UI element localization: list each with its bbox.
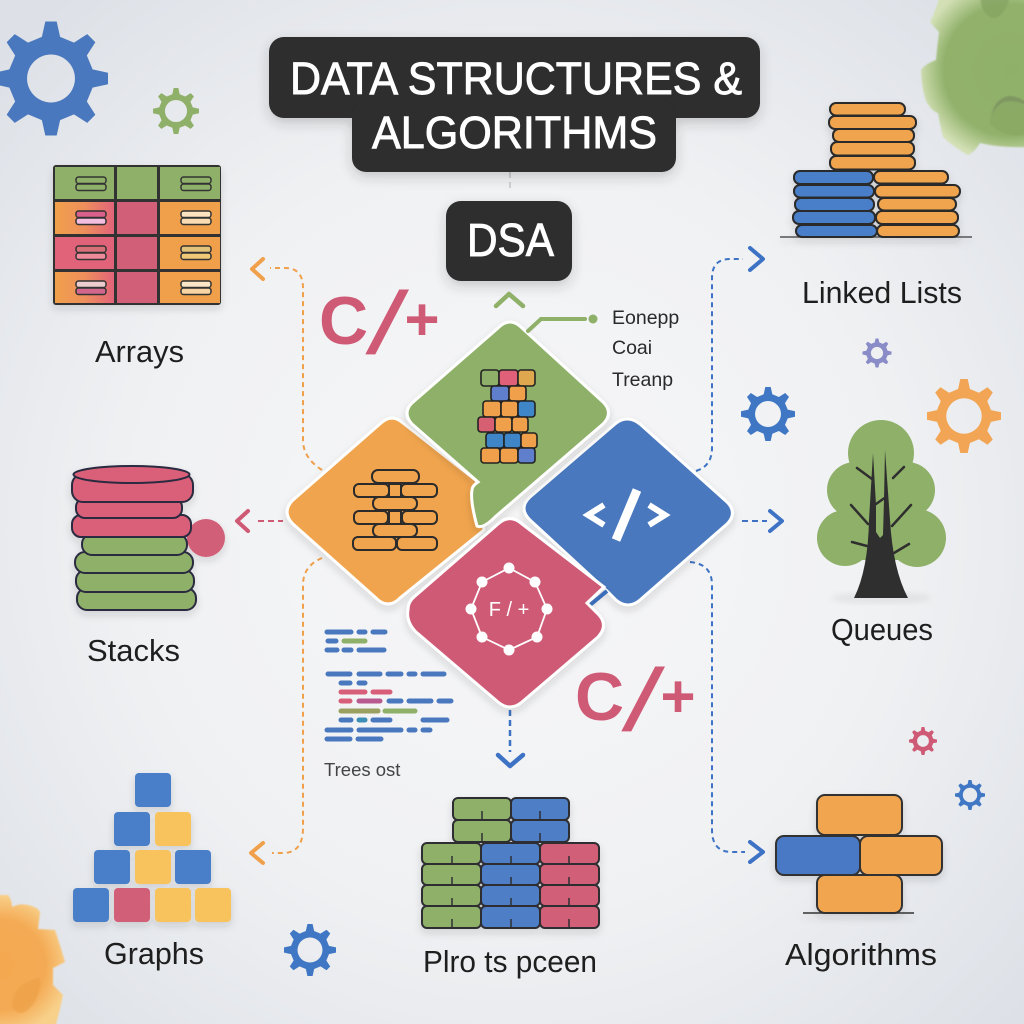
icon: orange brick wall — [353, 470, 437, 550]
icon: orange gear right — [927, 379, 1001, 453]
heading: C/+ top: C — [319, 283, 368, 359]
panel: bottom bricks — [422, 798, 599, 979]
icon: small blue gear right — [955, 780, 985, 810]
icon: node ring: F / + — [489, 599, 529, 621]
panel: green diamond — [407, 322, 608, 527]
title — [269, 37, 760, 172]
arrow: blue dashed connector to algorithms — [690, 562, 763, 862]
decorative green gear blob, top right — [921, 0, 1024, 155]
text: trees list: Trees ost — [324, 759, 400, 780]
icon: purple gear — [862, 338, 892, 368]
connector between title and DSA — [509, 172, 511, 191]
text block: callout labels: Treanp — [612, 369, 673, 391]
small blue stripe between pink and blue — [590, 591, 607, 605]
label: bottom bricks: Plro ts pceen — [423, 944, 597, 979]
label: queues: Queues — [831, 612, 933, 647]
arrow: pink dashed connector to stacks — [237, 511, 283, 531]
code snippet lines — [327, 632, 451, 739]
icon: brick stack — [422, 798, 599, 928]
icon: node ring — [466, 562, 552, 656]
panel: queues — [817, 420, 946, 647]
panel: stacks — [72, 466, 225, 668]
DSA badge: DSA — [467, 214, 554, 266]
heading: C/+ bottom: C — [575, 659, 624, 735]
label: linked lists: Linked Lists — [802, 275, 962, 310]
heading: C/+ bottom: / — [619, 654, 666, 748]
label: algorithms: Algorithms — [785, 937, 937, 972]
heading: C/+ top: / — [363, 277, 410, 371]
text block: callout labels: Coai — [612, 337, 652, 359]
DSA badge — [446, 201, 572, 281]
icon: tree — [817, 420, 946, 604]
arrow: blue dashed arrow down to bottom bricks — [498, 710, 523, 766]
label: graphs: Graphs — [104, 936, 204, 971]
text block: callout labels — [612, 307, 679, 391]
icon: disc stack — [72, 466, 225, 610]
panel: orange diamond — [287, 418, 484, 604]
heading: C/+ bottom — [575, 654, 696, 748]
panel: linked lists — [780, 103, 972, 310]
arrow: blue dashed connector to queues — [742, 511, 782, 531]
heading: C/+ top: + — [404, 286, 440, 353]
icon: large blue gear — [0, 22, 108, 136]
arrow: blue dashed connector to linked lists — [696, 248, 763, 471]
icon: small green gear — [153, 88, 199, 134]
decorative orange gear blob, bottom left — [0, 895, 65, 1024]
callout line and dot — [528, 314, 598, 331]
icon: coloured brick tower — [478, 370, 537, 463]
icon: code brackets — [588, 490, 665, 540]
title: DATA STRUCTURES & — [290, 53, 742, 104]
panel: algorithms — [776, 795, 942, 972]
panel: blue diamond — [524, 419, 732, 605]
panel: pink diamond — [408, 518, 604, 707]
label: stacks: Stacks — [87, 633, 180, 668]
icon: pink gear — [909, 727, 937, 755]
icon: stacked slabs — [780, 103, 972, 237]
panel: arrays — [53, 165, 221, 369]
arrow: orange dashed connector to arrays — [252, 259, 322, 470]
icon: array grid — [53, 165, 221, 305]
icon: interlocking blocks — [776, 795, 942, 913]
arrow: orange dashed connector to graphs — [251, 558, 322, 863]
heading: C/+ top — [319, 277, 440, 371]
arrow: green chevron to DSA — [496, 294, 523, 306]
icon: blue gear right — [741, 387, 795, 441]
heading: C/+ bottom: + — [660, 663, 696, 730]
label: arrays: Arrays — [95, 334, 184, 369]
panel: graphs — [73, 773, 231, 971]
icon: blue gear bottom — [284, 924, 336, 976]
icon: block pyramid — [73, 773, 231, 922]
text block: callout labels: Eonepp — [612, 307, 679, 329]
title: ALGORITHMS — [372, 107, 657, 158]
